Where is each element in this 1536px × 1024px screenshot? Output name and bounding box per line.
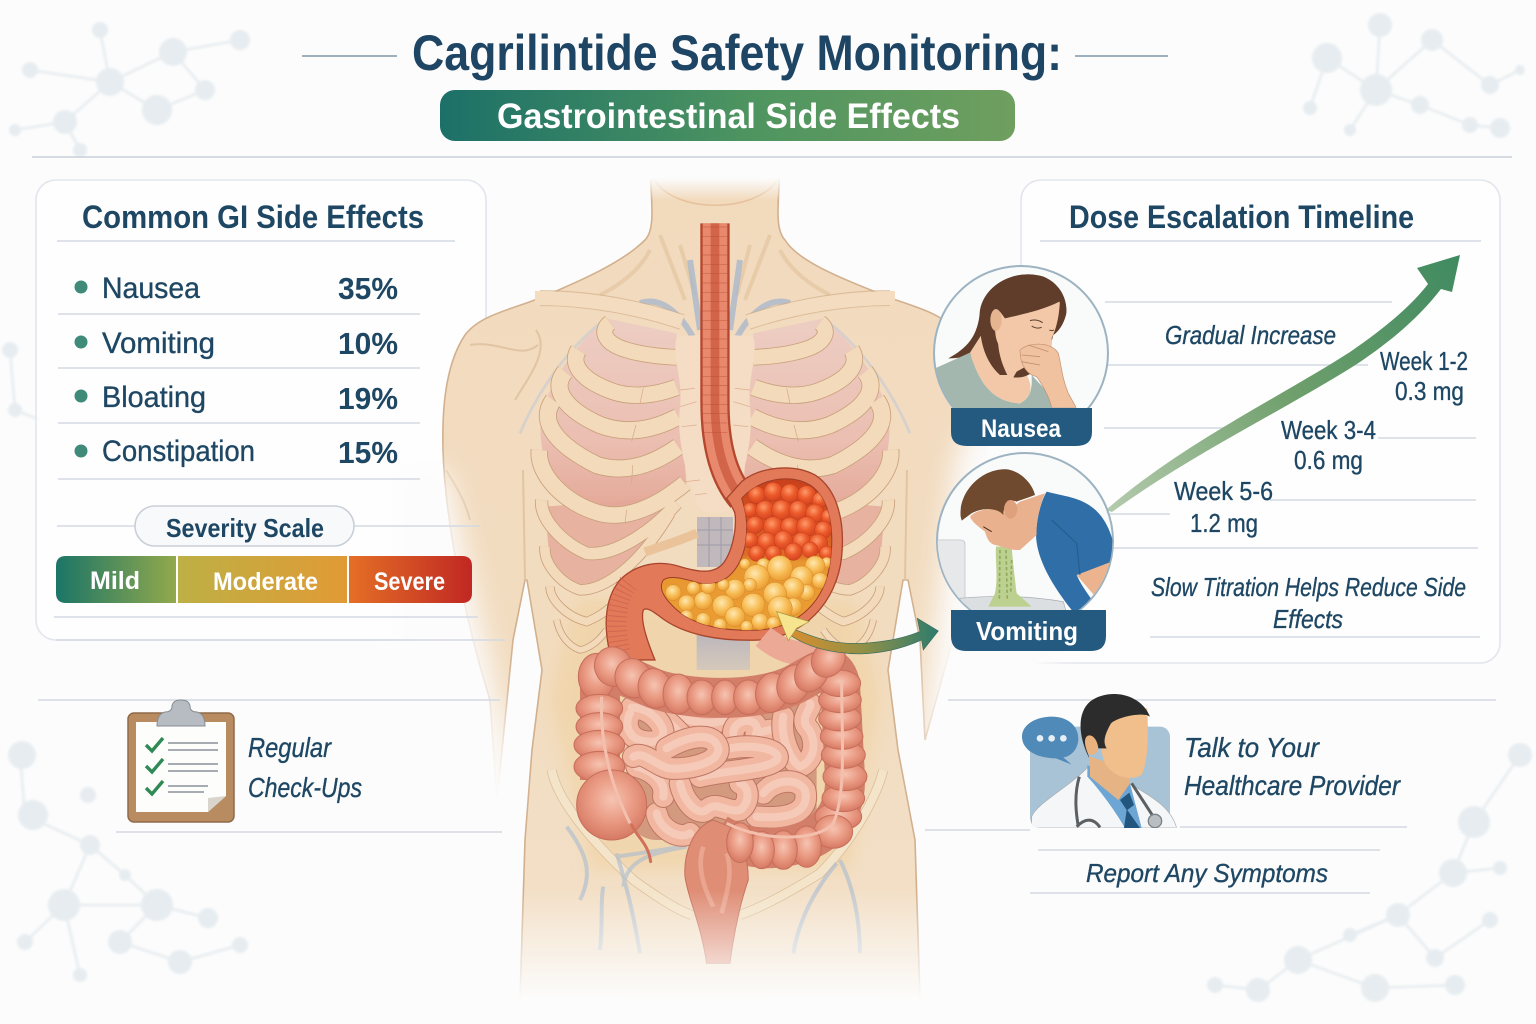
step: week 1-2: 0.3 mg bbox=[1395, 376, 1464, 406]
toilet bbox=[938, 540, 966, 604]
hair bbox=[960, 469, 1035, 521]
step: week 1-2 bbox=[1380, 346, 1468, 406]
vomiting label bbox=[951, 610, 1106, 651]
item: constipation bbox=[74, 435, 398, 470]
item: vomiting: 10% bbox=[338, 326, 398, 361]
severity scale bar: Mild bbox=[90, 567, 140, 595]
icon: clipboard bbox=[128, 700, 234, 822]
eye bbox=[983, 527, 992, 532]
ear bbox=[990, 309, 1002, 331]
item: nausea: 35% bbox=[338, 271, 398, 306]
portrait: nausea bbox=[934, 266, 1108, 446]
pancreas-side tube bbox=[763, 637, 827, 653]
severity scale label: Severity Scale bbox=[166, 513, 324, 543]
panel heading: Dose Escalation Timeline bbox=[1069, 199, 1414, 235]
pelvis and vessels bbox=[552, 630, 883, 953]
portrait: nausea: Nausea bbox=[981, 415, 1062, 443]
rectum highlight bbox=[701, 847, 729, 913]
hair strands near chin bbox=[1013, 368, 1030, 378]
abdomen cavity tone bbox=[550, 600, 880, 870]
portrait: vomiting bbox=[933, 453, 1113, 651]
callout: talk to your healthcare provider: Healthcare Provider bbox=[1184, 770, 1401, 801]
arrow: stomach to symptoms bbox=[777, 612, 938, 654]
body silhouette bbox=[443, 170, 986, 1000]
panel content: common GI side effects bbox=[54, 199, 505, 640]
shirt bbox=[1036, 492, 1113, 610]
callout: report any symptoms: Report Any Symptoms bbox=[1086, 858, 1328, 888]
callout: talk to your healthcare provider bbox=[925, 694, 1496, 833]
panel: dose escalation frame bbox=[1021, 180, 1500, 663]
subtitle banner: Gastrointestinal Side Effects bbox=[497, 97, 960, 136]
severity scale label bbox=[57, 506, 480, 546]
item: nausea bbox=[74, 271, 398, 306]
label: gradual increase: Gradual Increase bbox=[1165, 320, 1336, 350]
anatomical torso illustration bbox=[442, 180, 1058, 992]
arm bbox=[1076, 561, 1110, 595]
hair back bbox=[948, 274, 1066, 358]
chin line bbox=[652, 176, 780, 205]
step: week 3-4 bbox=[1281, 415, 1376, 475]
step: week 5-6: Week 5-6 bbox=[1174, 476, 1273, 506]
colon strips and appendix bbox=[601, 680, 843, 837]
item: vomiting: Vomiting bbox=[102, 327, 215, 360]
panel heading: Common GI Side Effects bbox=[82, 199, 424, 235]
item: nausea: Nausea bbox=[102, 272, 200, 305]
shirt bbox=[935, 353, 1052, 410]
hair bbox=[1081, 694, 1150, 758]
right rib cage and lung bbox=[710, 318, 910, 650]
face bbox=[1101, 708, 1148, 778]
callout: regular check-ups: Check-Ups bbox=[248, 772, 362, 803]
intestines bbox=[574, 635, 867, 963]
severity scale bar bbox=[56, 556, 472, 603]
item: bloating: Bloating bbox=[102, 381, 206, 414]
step: week 5-6 bbox=[1174, 476, 1273, 538]
title: Cagrilintide Safety Monitoring: bbox=[412, 25, 1062, 81]
face bbox=[995, 302, 1060, 350]
item: constipation: Constipation bbox=[102, 435, 255, 468]
icon: doctor with speech bubble bbox=[1022, 694, 1177, 833]
nausea label bbox=[951, 408, 1092, 446]
label: Talk to Your bbox=[1184, 732, 1321, 763]
step: week 5-6: 1.2 mg bbox=[1190, 508, 1258, 538]
large intestine tube bbox=[600, 669, 845, 848]
neck muscles bbox=[600, 235, 830, 300]
speech bubble bbox=[1022, 717, 1078, 765]
fade overlays bbox=[480, 890, 950, 1000]
step: week 3-4: 0.6 mg bbox=[1294, 445, 1363, 475]
spine column bbox=[697, 517, 733, 567]
stethoscope bbox=[1076, 777, 1153, 827]
severity scale bar: Severe bbox=[374, 568, 445, 596]
oesophagus bbox=[715, 223, 742, 498]
coat bbox=[1032, 767, 1177, 828]
severity scale bar: Moderate bbox=[213, 568, 318, 596]
panel content: dose escalation timeline bbox=[1040, 199, 1481, 637]
shirt bbox=[1087, 765, 1142, 828]
item: vomiting bbox=[74, 326, 398, 361]
note: slow titration: Slow Titration Helps Reduce Side bbox=[1151, 572, 1466, 602]
neck bbox=[1090, 757, 1130, 800]
chest and neck bbox=[970, 336, 1030, 404]
portrait: vomiting: Vomiting bbox=[976, 616, 1078, 646]
callout: regular check-ups bbox=[38, 700, 502, 832]
note: slow titration bbox=[1151, 572, 1466, 634]
left rib cage and lung bbox=[520, 318, 720, 650]
large intestine segments bbox=[574, 635, 867, 869]
fringe bbox=[996, 274, 1066, 318]
rising dose arrow bbox=[1106, 255, 1460, 512]
ear bbox=[1084, 735, 1098, 755]
panel: common GI side effects frame bbox=[36, 180, 486, 640]
item: constipation: 15% bbox=[338, 435, 398, 470]
ear bbox=[1004, 500, 1017, 519]
face and neck bbox=[970, 493, 1045, 550]
step: week 1-2: Week 1-2 bbox=[1380, 346, 1468, 376]
step: week 3-4: Week 3-4 bbox=[1281, 415, 1376, 445]
sigmoid join bbox=[727, 823, 753, 863]
note: slow titration: Effects bbox=[1273, 604, 1343, 634]
hair side lock bbox=[980, 310, 1007, 375]
rectum bbox=[685, 820, 748, 963]
arm and shoulder creases bbox=[446, 330, 907, 580]
blue vessels at clavicle bbox=[640, 260, 790, 345]
liver tone bbox=[645, 533, 697, 552]
clavicles bbox=[540, 298, 682, 322]
tie bbox=[1120, 793, 1140, 828]
stomach and duodenum bbox=[606, 468, 842, 660]
item: bloating: 19% bbox=[338, 381, 398, 416]
label: Regular bbox=[248, 732, 332, 763]
item: bloating bbox=[74, 381, 398, 416]
vomit bbox=[988, 547, 1032, 607]
arm and hand bbox=[1020, 344, 1076, 407]
subtitle banner bbox=[440, 90, 1015, 141]
eye and brow bbox=[1030, 320, 1054, 331]
small intestine bbox=[627, 700, 817, 840]
